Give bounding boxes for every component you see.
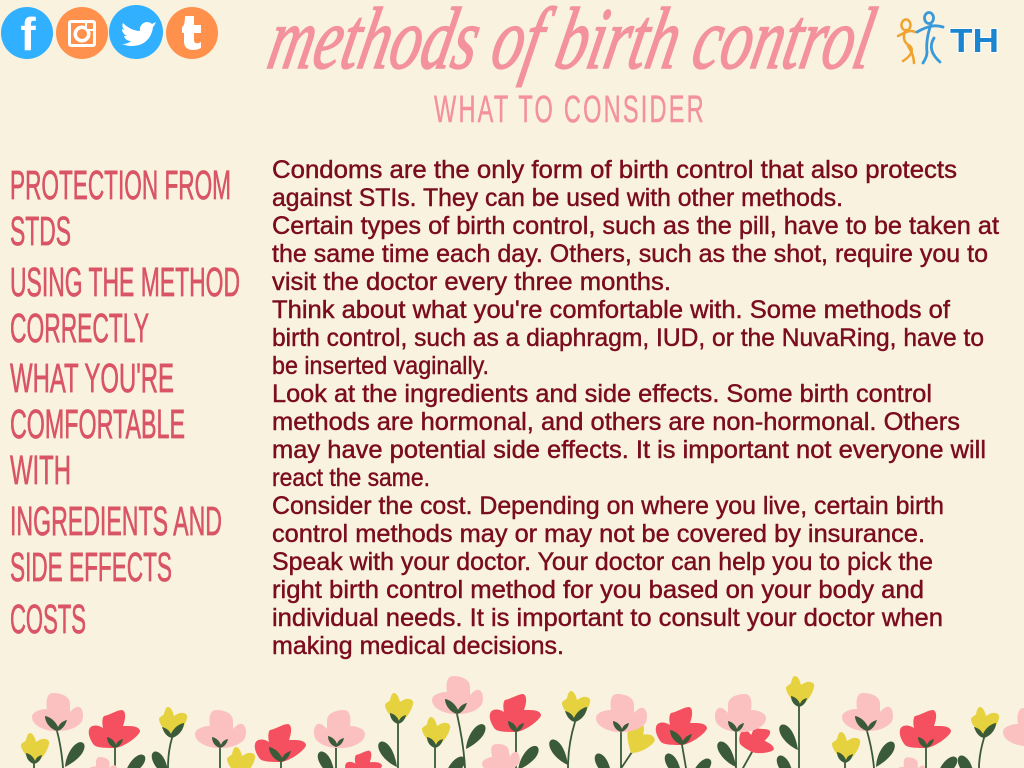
heading: what you're comfortable with: COMFORTABLE [10, 401, 185, 447]
text: ingredients: Look at the ingredients and side effects. Some birth control [272, 380, 932, 408]
flower: pink [715, 694, 766, 732]
right column: explanations [272, 156, 999, 660]
icon: tumblr [166, 7, 218, 59]
subtitle: WHAT TO CONSIDER [434, 87, 704, 130]
text: comfort [272, 296, 984, 380]
text: doctor: individual needs. It is important to consult your doctor when [272, 604, 943, 632]
text: correct use: visit the doctor every three months. [272, 268, 671, 296]
flower: pink [1003, 708, 1024, 746]
flower: yellow [159, 707, 187, 738]
text: condoms [272, 156, 957, 212]
logo: TH [898, 12, 999, 63]
flower: yellow [422, 717, 450, 748]
flower: red [490, 694, 541, 732]
logo wordmark: TH [950, 22, 999, 59]
text: comfort: be inserted vaginally. [272, 352, 489, 380]
flower: red [656, 707, 707, 745]
text: doctor: making medical decisions. [272, 632, 564, 660]
heading: using the method correctly [10, 259, 240, 351]
heading: what you're comfortable with [10, 355, 185, 493]
flowers behind [88, 719, 926, 768]
text: ingredients: may have potential side effects. It is important not everyone will [272, 436, 986, 464]
text: comfort: Think about what you're comfortable with. Some methods of [272, 296, 950, 324]
heading: ingredients and side effects [10, 498, 222, 590]
icon: instagram [56, 7, 108, 59]
text: cost: control methods may or may not be covered by insurance. [272, 520, 925, 548]
heading: protection from STDs [10, 162, 231, 254]
heading: using the method correctly: CORRECTLY [10, 305, 149, 351]
text: correct use [272, 212, 999, 296]
text: correct use: Certain types of birth control, such as the pill, have to be taken at [272, 212, 999, 240]
heading: protection from STDs: PROTECTION FROM [10, 162, 231, 208]
flower: yellow [385, 693, 413, 724]
heading: what you're comfortable with: WHAT YOU'RE [10, 355, 174, 401]
flower: pink [596, 694, 647, 732]
text: doctor: right birth control method for you based on your body and [272, 576, 924, 604]
flower: red [255, 724, 306, 762]
text: condoms: against STIs. They can be used with other methods. [272, 184, 843, 212]
text: cost [272, 492, 944, 548]
flower: yellow [832, 732, 860, 763]
heading: ingredients and side effects: SIDE EFFECTS [10, 544, 172, 590]
heading: using the method correctly: USING THE METHOD [10, 259, 240, 305]
heading: ingredients and side effects: INGREDIENTS AND [10, 498, 222, 544]
flower: pink [314, 710, 365, 748]
flower border [21, 676, 1024, 768]
flower: red [89, 710, 140, 748]
flower: yellow [786, 676, 814, 707]
icon: blue dancer [917, 12, 943, 63]
heading: protection from STDs: STDS [10, 208, 71, 254]
flower: pink [432, 676, 483, 714]
icon: facebook: f [20, 8, 36, 60]
heading: what you're comfortable with: WITH [10, 447, 71, 493]
icon: twitter [109, 5, 163, 59]
flower: yellow [971, 707, 999, 738]
text: ingredients: react the same. [272, 464, 430, 492]
text: ingredients: methods are hormonal, and others are non-hormonal. Others [272, 408, 960, 436]
icon: orange dancer [898, 20, 915, 63]
text: cost: Consider the cost. Depending on where you live, certain birth [272, 492, 944, 520]
text: ingredients [272, 380, 986, 492]
text: doctor: Speak with your doctor. Your doctor can help you to pick the [272, 548, 933, 576]
flower: yellow [21, 733, 49, 764]
flower: yellow [562, 691, 590, 722]
text: correct use: the same time each day. Others, such as the shot, require you to [272, 240, 988, 268]
icon: facebook [1, 7, 53, 60]
left column: considerations [10, 162, 240, 642]
flower: pink [32, 693, 83, 731]
text: doctor [272, 548, 943, 660]
text: comfort: birth control, such as a diaphragm, IUD, or the NuvaRing, have to [272, 324, 984, 352]
flower: pink [842, 693, 893, 731]
flower: pink [195, 710, 246, 748]
text: condoms: Condoms are the only form of birth control that also protects [272, 156, 957, 184]
social icons [1, 5, 218, 60]
flower: red [900, 710, 951, 748]
heading: costs: COSTS [10, 596, 86, 642]
